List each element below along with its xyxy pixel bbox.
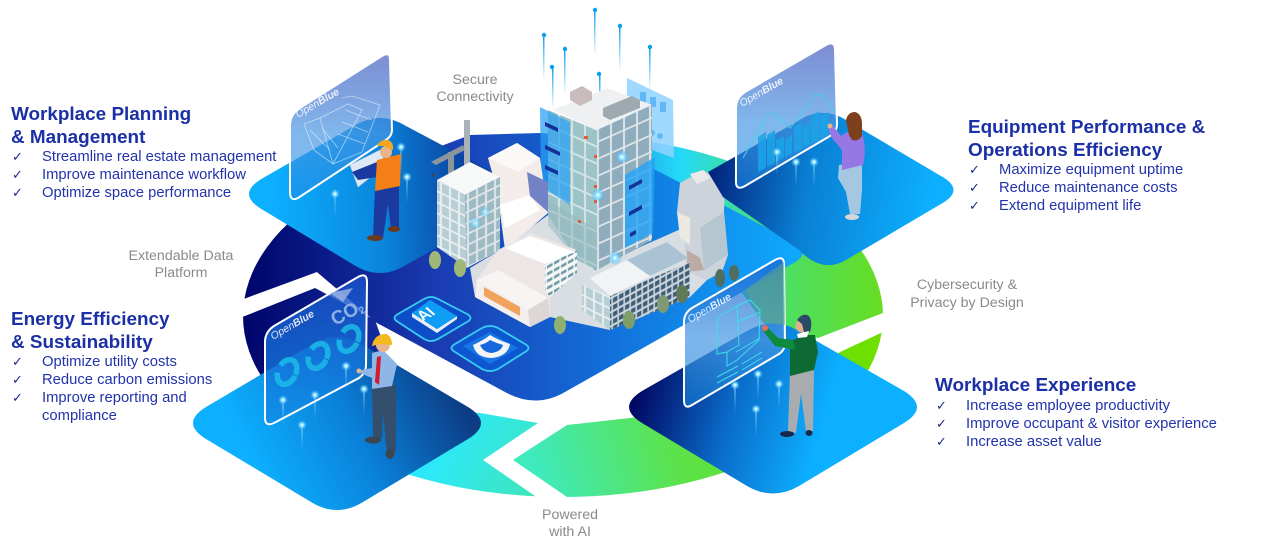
heading and list: workplace experience: Increase employee productivity	[966, 398, 1171, 414]
screen: CO2 charts	[265, 275, 368, 424]
heading and list: workplace planning: ✓	[12, 150, 23, 165]
heading and list: energy efficiency: Improve reporting and	[42, 390, 187, 406]
screen: building model: OpenBlue	[294, 86, 342, 121]
crane	[431, 120, 470, 178]
heading and list: workplace planning: Workplace Planning	[11, 104, 191, 125]
white podium building	[475, 233, 577, 327]
heading and list: workplace planning: ✓	[12, 186, 23, 201]
heading and list: energy efficiency: ✓	[12, 373, 23, 388]
heading and list: equipment performance: Equipment Performance &	[968, 117, 1206, 138]
heading and list: equipment performance: Operations Efficiency	[968, 140, 1163, 161]
pink mid building	[488, 143, 548, 250]
central building cluster	[429, 78, 739, 334]
screen: floor plan: OpenBlue	[686, 291, 734, 326]
heading and list: equipment performance: Reduce maintenance costs	[999, 180, 1178, 196]
heading and list: energy efficiency: Reduce carbon emissions	[42, 372, 212, 388]
screen: equipment chart	[736, 43, 837, 188]
back data screen	[627, 78, 674, 158]
screen: CO2 charts: CO	[327, 298, 363, 330]
heading and list: equipment performance: ✓	[969, 181, 980, 196]
label: cybersecurity and privacy	[910, 277, 1024, 311]
ground paving	[470, 215, 725, 330]
heading and list: workplace experience	[935, 375, 1217, 450]
panel: equipment performance platform	[708, 43, 954, 265]
panel: workplace planning platform	[249, 54, 517, 273]
heading and list: workplace planning: & Management	[11, 127, 146, 148]
label: secure connectivity: Connectivity	[436, 89, 515, 105]
tower left data screen	[540, 107, 570, 205]
heading and list: energy efficiency: compliance	[42, 408, 117, 424]
heading and list: workplace experience: Improve occupant & visitor experience	[966, 416, 1217, 432]
heading and list: workplace planning: Improve maintenance workflow	[42, 167, 246, 183]
heading and list: workplace planning: Optimize space performance	[42, 185, 231, 201]
sensor pins above tower	[542, 8, 652, 116]
heading and list: workplace planning: ✓	[12, 168, 23, 183]
heading and list: energy efficiency: ✓	[12, 355, 23, 370]
figure: engineer in hard hat	[356, 334, 397, 459]
panel: energy efficiency platform	[193, 275, 481, 510]
screen: CO2 charts: OpenBlue	[268, 308, 317, 343]
heading and list: equipment performance: ✓	[969, 199, 980, 214]
heading and list: equipment performance: Extend equipment life	[999, 198, 1141, 214]
heading and list: energy efficiency	[11, 309, 212, 424]
label: powered with AI: with AI	[548, 524, 591, 540]
front right office building	[582, 242, 690, 330]
heading and list: energy efficiency: & Sustainability	[11, 332, 153, 353]
screen: floor plan	[684, 258, 785, 407]
heading and list: workplace experience: ✓	[936, 417, 947, 432]
screen: CO2 charts: 2	[357, 305, 368, 317]
heading and list: workplace experience: Workplace Experience	[935, 375, 1136, 396]
panel: workplace experience platform	[629, 258, 917, 494]
heading and list: workplace planning: Streamline real estate management	[42, 149, 276, 165]
label: cybersecurity and privacy: Cybersecurity &	[917, 277, 1018, 293]
label: secure connectivity: Secure	[453, 72, 498, 88]
screen: equipment chart: OpenBlue	[738, 75, 786, 110]
heading and list: workplace experience: Increase asset value	[966, 434, 1102, 450]
heading and list: equipment performance: ✓	[969, 163, 980, 178]
gray right tower	[677, 170, 728, 280]
heading and list: workplace experience: ✓	[936, 399, 947, 414]
heading and list: workplace experience: ✓	[936, 435, 947, 450]
label: extendable data platform: Extendable Data	[129, 248, 234, 264]
figure: man in green sweater	[762, 315, 818, 437]
left glass building	[437, 162, 500, 268]
figure: woman touching screen	[828, 112, 865, 220]
label: extendable data platform	[129, 248, 234, 281]
heading and list: equipment performance	[968, 117, 1206, 214]
label: powered with AI	[542, 507, 598, 540]
ring: circular platform base	[243, 142, 883, 497]
heading and list: energy efficiency: Energy Efficiency	[11, 309, 170, 330]
trees	[429, 251, 739, 334]
main tower	[548, 86, 652, 270]
heading and list: equipment performance: Maximize equipment uptime	[999, 162, 1183, 178]
heading and list: energy efficiency: ✓	[12, 391, 23, 406]
icon: AI chip tile	[394, 297, 470, 341]
icon: shield tile	[452, 326, 528, 371]
heading and list: energy efficiency: Optimize utility costs	[42, 354, 177, 370]
tower right data screen	[625, 157, 655, 248]
figure: worker reading blueprint	[350, 140, 401, 241]
glow points on towers	[591, 150, 629, 265]
label: cybersecurity and privacy: Privacy by Design	[910, 295, 1024, 311]
central platform	[300, 133, 802, 400]
label: extendable data platform: Platform	[155, 265, 207, 281]
screen: building model	[290, 54, 392, 199]
label: powered with AI: Powered	[542, 507, 598, 523]
label: secure connectivity	[436, 72, 515, 105]
icon: AI chip tile: AI	[413, 305, 439, 324]
heading and list: workplace planning	[11, 104, 276, 201]
